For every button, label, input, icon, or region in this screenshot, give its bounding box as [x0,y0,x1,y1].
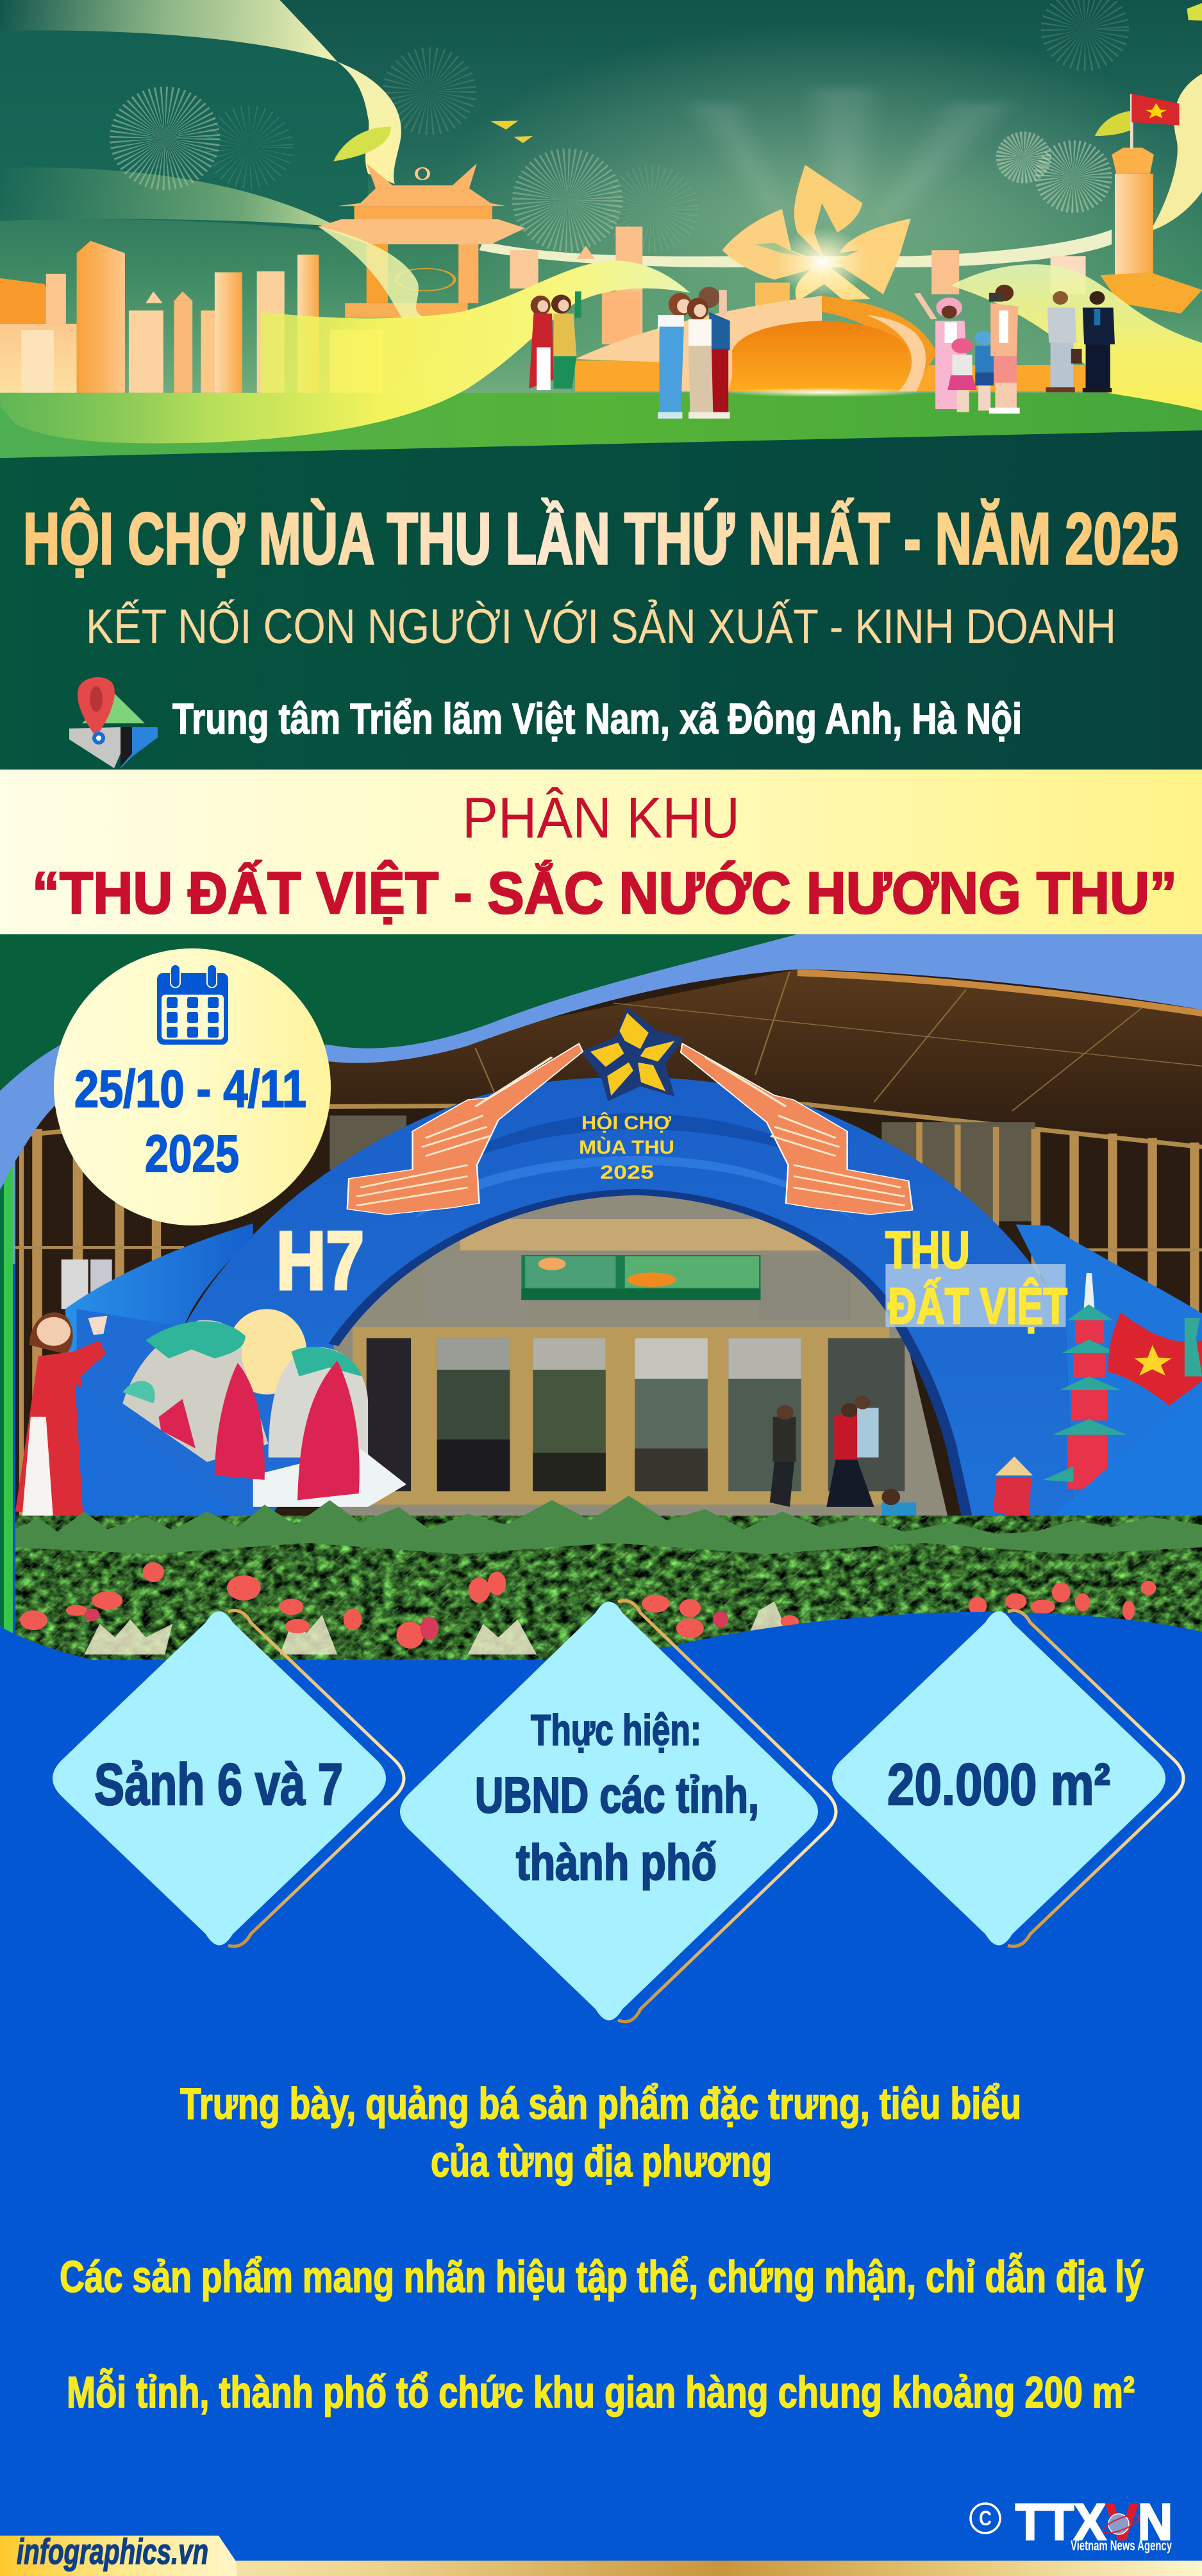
icon: map pin [69,677,158,768]
people: family [914,285,1020,414]
text: halls: Sảnh 6 và 7 [94,1752,343,1817]
flag on mural [1108,1313,1202,1406]
ribbon: horizontal cream [480,230,1112,267]
mural blue hill left [75,1383,253,1538]
text: THU DAT VIET: THU [885,1221,970,1279]
logo: TTXVN: C [979,2507,992,2530]
panel: cream band [0,770,1202,934]
diamond shape [832,1611,1165,1946]
people at entrance [770,1396,916,1529]
foliage top [15,1495,1202,1554]
wall band [15,1104,1202,1147]
text block: description [60,2079,1144,2417]
ground glow [724,388,924,397]
people: selfie trio [658,287,730,419]
text: area: 20.000 m² [887,1752,1110,1817]
gold outline [618,1601,836,2022]
text: fair name on arch: 2025 [600,1162,654,1183]
ribbon: big yellow right [951,264,1202,410]
icon: calendar [157,964,228,1045]
sky background [0,0,1202,424]
line 2: của từng địa phương [431,2137,772,2186]
text: date: 25/10 - 4/11 [74,1060,306,1118]
ceiling trim [797,970,1202,1016]
exhibition building [575,296,1089,391]
text: fair name on arch: MÙA THU [579,1136,674,1158]
right mural panel [1016,1224,1202,1529]
columns [19,1122,1199,1516]
mural red sails [159,1361,360,1500]
diamond: organisers [400,1601,836,2022]
text: organiser label: Thực hiện: [531,1706,701,1755]
mural karst rocks [122,1320,406,1507]
golden flower on arch [581,1007,684,1101]
diamond shape [400,1602,818,2020]
diamond: area [832,1610,1183,1946]
arch lighter band [414,1156,859,1224]
heading: zone label: PHÂN KHU [462,786,740,850]
glass doors [353,1327,905,1504]
text: fair name on arch [579,1112,674,1183]
left green stripes [0,1166,13,1642]
people: businessmen [1046,291,1115,392]
foliage base [0,1516,1202,1660]
Vietnam flag [1130,94,1179,149]
woven motif right [681,1043,912,1215]
ribbon: through temple [318,226,428,319]
text: website: infographics.vn [17,2531,208,2572]
text: organiser line 2: thành phố [516,1834,717,1890]
lattice glass [330,1116,1035,1221]
temple gate [318,164,525,318]
ribbon: top left [0,0,337,62]
pagoda [1043,1273,1127,1489]
entrance screen [521,1255,760,1300]
wall crossbars [15,1246,1202,1309]
text: THU DAT VIET [885,1221,1067,1334]
circle background [54,948,331,1225]
date circle [54,948,331,1225]
blue body wave [0,1612,1202,2576]
logo globe [1101,2511,1141,2537]
panel: dark green title band [0,423,1202,770]
arch inner edge [333,1192,970,1529]
text: year: 2025 [145,1125,239,1183]
copyright mark [971,2504,1000,2533]
ribbon: big yellow left [0,260,690,443]
golden flower monument [722,165,911,309]
small conical hat figure [993,1456,1033,1531]
flag tower [1100,147,1202,314]
footer band [0,2561,1202,2576]
arch [184,1077,1073,1534]
motif stripes [356,1057,905,1206]
ribbon: top left tail [337,62,401,184]
ribbon: right edge [1150,74,1202,231]
foliage leaf texture [0,1516,1202,1660]
footer tab [0,2536,237,2576]
entrance interior [330,1192,951,1529]
mural blue hill right [1035,1392,1202,1538]
leaves [333,3,1202,162]
mural moon [227,1309,306,1394]
diamond: halls [53,1610,404,1946]
buildings skyline [0,226,1086,393]
text: THU DAT VIET: ĐẤT VIỆT [888,1277,1067,1334]
text: organiser line 1: UBND các tỉnh, [475,1767,759,1823]
panel: header illustration [0,0,1202,458]
logo wordmark: TTXVN [1015,2493,1173,2550]
light rays [690,88,1012,265]
ceiling and wall [0,967,1202,1552]
left mural panel [65,1224,253,1352]
mural woman in red ao dai [15,1312,107,1525]
text: H7: H7 [276,1215,364,1307]
gold outline [228,1610,404,1946]
logo: TTXVN [971,2493,1173,2554]
ground [0,393,1202,458]
photo: fair gate H7 [0,967,1202,1660]
flowers and white leaves [20,1562,1156,1654]
panel: photo background dark green [0,934,1202,1255]
diamond shape [53,1611,386,1946]
light blue wave [0,934,1202,1264]
left dark swirl [0,31,387,235]
woven motif left [347,1043,583,1215]
gold outline [1008,1610,1183,1946]
text: gate labels [276,1112,1067,1334]
people: ao dai pair [529,291,581,390]
ribbon: middle left [0,167,337,226]
fireworks [137,9,1107,231]
text: fair name on arch: HỘI CHỢ [581,1112,671,1134]
centre glow [430,24,1202,389]
THU DAT VIET signboard backing [885,1264,1065,1327]
